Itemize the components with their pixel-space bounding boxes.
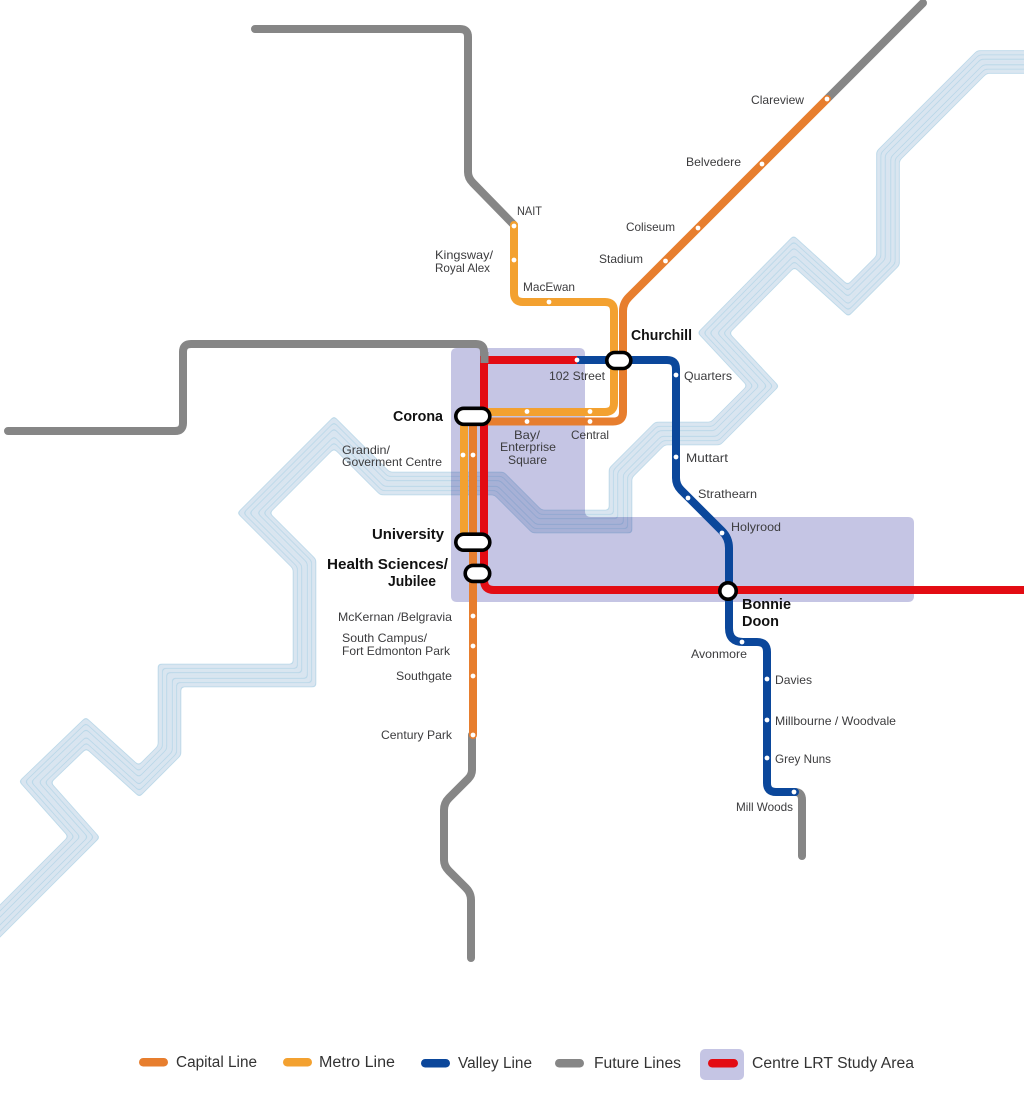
legend: Centre LRT Study Area	[700, 1049, 914, 1080]
station labels: MacEwan	[523, 280, 575, 294]
interchange labels: Bonnie	[742, 597, 791, 613]
interchange: Health Sciences/Jubilee	[465, 565, 490, 581]
station labels: Century Park	[381, 728, 453, 742]
station labels: Central	[571, 428, 609, 442]
legend: Valley Line: Valley Line	[458, 1055, 532, 1072]
station labels: Grey Nuns	[775, 752, 831, 766]
station labels: Muttart	[686, 451, 729, 465]
station labels: Bay/	[514, 428, 541, 442]
station labels: Mill Woods	[736, 800, 793, 814]
station labels: Holyrood	[731, 520, 781, 534]
station labels: Stadium	[599, 252, 643, 266]
station labels: Millbourne / Woodvale	[775, 714, 896, 728]
interchange labels: University	[372, 527, 444, 543]
station labels: 102 Street	[549, 369, 606, 383]
Capital Line	[473, 99, 827, 735]
station labels: South Campus/	[342, 631, 428, 645]
Centre LRT line	[484, 360, 1024, 590]
station labels: Strathearn	[698, 487, 757, 501]
station labels: NAIT	[517, 204, 543, 218]
future lines	[8, 3, 923, 958]
interchange labels: Corona	[393, 409, 444, 425]
interchange labels: Churchill	[631, 328, 692, 344]
legend	[139, 1049, 914, 1080]
station labels: Clareview	[751, 93, 804, 107]
interchange: Corona	[456, 408, 490, 424]
station labels: Enterprise	[500, 440, 556, 454]
station labels: Belvedere	[686, 155, 741, 169]
interchange labels	[327, 328, 791, 630]
station labels: Square	[508, 453, 547, 467]
legend: Valley Line	[421, 1055, 532, 1072]
station labels	[338, 93, 896, 814]
legend: Capital Line	[139, 1054, 257, 1071]
station labels: Grandin/	[342, 443, 391, 457]
interchange: Bonnie Doon	[720, 583, 736, 599]
Metro Line	[464, 225, 614, 541]
legend: Metro Line	[283, 1054, 395, 1071]
interchange labels: Doon	[742, 614, 779, 630]
legend: Future Lines	[555, 1055, 681, 1072]
station labels: Coliseum	[626, 220, 675, 234]
interchange: Churchill	[607, 352, 631, 368]
legend: Metro Line: Metro Line	[319, 1054, 395, 1071]
station labels: Royal Alex	[435, 261, 490, 275]
interchange labels: Jubilee	[388, 574, 436, 590]
station dots	[461, 97, 829, 794]
station labels: Kingsway/	[435, 248, 494, 262]
station labels: Avonmore	[691, 647, 747, 661]
station labels: Quarters	[684, 369, 732, 383]
station labels: Goverment Centre	[342, 455, 442, 469]
legend: Capital Line: Capital Line	[176, 1054, 257, 1071]
legend: Centre LRT Study Area: Centre LRT Study Area	[752, 1055, 914, 1072]
station labels: Davies	[775, 673, 812, 687]
Valley Line	[577, 360, 795, 792]
interchange labels: Health Sciences/	[327, 557, 448, 573]
legend: Future Lines: Future Lines	[594, 1055, 681, 1072]
station labels: Fort Edmonton Park	[342, 644, 451, 658]
interchange: University	[456, 534, 490, 550]
future line stub	[480, 352, 488, 363]
Centre LRT study area	[451, 348, 914, 602]
station labels: Southgate	[396, 669, 452, 683]
station labels: McKernan /Belgravia	[338, 610, 452, 624]
